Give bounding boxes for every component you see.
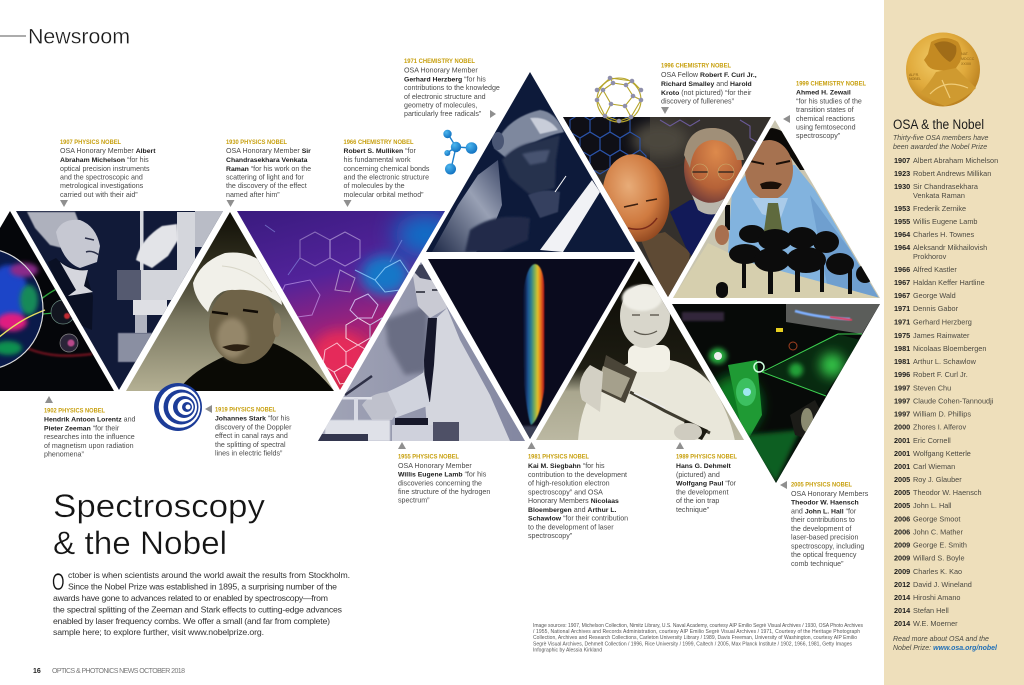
caption: 1955 physics: fine structure of the hydrogen	[398, 488, 490, 496]
caption: 1989 physics: the development	[676, 488, 728, 496]
caption: 1981 physics: spectroscopy” and OSA	[528, 488, 603, 496]
laureate list: 2014	[894, 593, 911, 602]
laureate list: Claude Cohen-Tannoudji	[913, 396, 994, 406]
caption: 1902 physics: researches into the influence	[44, 433, 135, 441]
caption: 1919 physics: effect in canal rays and	[215, 432, 288, 440]
image credits: Segrè Visual Archives, Dehmelt Collection / 1996, Rice University / 1999, Caltech / 2005, Max Planck Institute / 1902, 1966, 1981, Getty Images	[533, 642, 852, 648]
caption: 1907 physics: metrological investigations	[60, 182, 144, 190]
laureate list: Dennis Gabor	[913, 304, 959, 313]
icon: spiral target	[154, 383, 202, 431]
laureate list: Nicolaas Bloembergen	[913, 344, 986, 353]
caption: 1971 chemistry: geometry of molecules,	[404, 102, 477, 110]
caption: 1955 physics: 1955 PHYSICS NOBEL	[398, 454, 459, 460]
triangle photo: 1971 Herzberg	[420, 65, 640, 255]
laureate list: 2006	[894, 528, 910, 536]
caption: 1907 physics: carried out with their aid”	[60, 191, 138, 199]
caption: 1999 chemistry: chemical reactions	[796, 115, 855, 123]
caption: 1999 chemistry: Ahmed H. Zewail	[796, 90, 851, 96]
laureate list: 1964	[894, 243, 911, 252]
laureate list: John C. Mather	[913, 528, 963, 536]
laureate list: William D. Phillips	[913, 410, 971, 418]
footer: 16	[33, 668, 41, 675]
caption: 1907 physics: optical precision instruments	[60, 165, 150, 173]
caption: 1930 physics: scattering of light and for	[226, 174, 304, 182]
arrow: 1996 pointer	[661, 107, 669, 114]
caption: 1971 chemistry: OSA Honorary Member	[404, 66, 478, 74]
laureate list: 2009	[894, 540, 910, 550]
triangle photo: 1989 Dehmelt	[536, 261, 744, 440]
sidebar footer link: Nobel Prize: www.osa.org/nobel	[893, 645, 998, 652]
arrow: 1907 pointer	[60, 200, 68, 207]
caption: 1981 physics: 1981 PHYSICS NOBEL	[528, 454, 589, 460]
caption: 1930 physics	[226, 139, 311, 199]
caption: 1981 physics: to the development of laser	[528, 524, 614, 532]
caption: 1971 chemistry: 1971 CHEMISTRY NOBEL	[404, 58, 475, 65]
caption: 1989 physics: technique”	[676, 506, 710, 514]
triangle photo: 1996 Curl and Smalley	[560, 110, 775, 300]
caption: 1919 physics: discovery of the Doppler	[215, 424, 292, 432]
laureate list: 2009	[894, 554, 910, 562]
laureate list: 2012	[894, 580, 910, 589]
caption: 1902 physics: Pieter Zeeman “for their	[44, 424, 120, 432]
laureate list: Albert Abraham Michelson	[913, 156, 998, 165]
caption: 1996 chemistry: Richard Smalley and Harold	[661, 80, 752, 88]
laureate list: W.E. Moerner	[913, 619, 958, 628]
caption: 1989 physics: Hans G. Dehmelt	[676, 463, 731, 470]
intro paragraph: awards have gone to advances related to or enabled by spectroscopy—from	[53, 593, 328, 603]
caption: 1955 physics: Willis Eugene Lamb “for his	[398, 470, 487, 478]
caption: 1971 chemistry: particularly free radicals”	[404, 110, 482, 118]
laureate list: 2005	[894, 501, 910, 510]
arrow: 2005 pointer	[780, 481, 787, 489]
arrow: 1930 pointer	[226, 200, 234, 207]
image credits	[533, 623, 864, 654]
caption: 2005 physics: the development of	[791, 525, 851, 533]
laureate list: Eric Cornell	[913, 436, 951, 445]
caption: 2005 physics: their contributions to	[791, 516, 855, 524]
sidebar subhead: Thirty-five OSA members have	[893, 135, 989, 142]
caption: 2005 physics: 2005 PHYSICS NOBEL	[791, 482, 852, 488]
laureate list: 1955	[894, 217, 910, 226]
arrow: 1966 pointer	[344, 200, 352, 207]
caption: 1907 physics: 1907 PHYSICS NOBEL	[60, 139, 121, 146]
intro paragraph: the spectral splitting of the Zeeman and Stark effects to cutting-edge advances	[53, 604, 343, 614]
laureate list: Robert Andrews Millikan	[913, 169, 991, 178]
laureate list: 2005	[894, 475, 910, 484]
laureate list: Robert F. Curl Jr.	[913, 370, 968, 379]
icon: Nobel medal: ALFR.	[909, 73, 919, 77]
laureate list: 1966	[894, 265, 910, 274]
laureate list	[894, 156, 998, 628]
laureate list: 1981	[894, 344, 910, 353]
sidebar content	[893, 32, 998, 652]
intro paragraph: O	[52, 569, 64, 596]
arrow: 1989 pointer	[676, 442, 684, 449]
laureate list: 2001	[894, 436, 910, 445]
laureate list: Zhores I. Alferov	[913, 422, 966, 432]
caption: 1996 chemistry: OSA Fellow Robert F. Curl Jr.,	[661, 71, 757, 79]
caption: 1981 physics: spectroscopy”	[528, 532, 573, 540]
caption: 1971 chemistry: of electronic structure and	[404, 93, 486, 101]
caption: 1919 physics: the splitting of spectral	[215, 441, 286, 449]
caption: 1996 chemistry: Kroto (not pictured) “for their	[661, 89, 752, 97]
icon: Nobel medal	[906, 32, 980, 106]
caption: 1999 chemistry: using femtosecond	[796, 124, 856, 132]
laureate list: 2006	[894, 514, 910, 524]
header: Newsroom: Newsroom	[28, 24, 130, 48]
caption: 1966 chemistry: and the electronic structure	[344, 174, 429, 182]
title	[53, 488, 265, 561]
caption: 2005 physics	[791, 482, 869, 568]
laureate list: Haldan Keffer Hartline	[913, 278, 985, 287]
triangle photo: 1981 spectrum	[428, 259, 635, 439]
laureate list: George Wald	[913, 291, 956, 300]
image credits: Image sources: 1907, Michelson Collection, Nimitz Library, U.S. Naval Academy, courtesy AIP Emilio Segrè Visual Archives / 1930, OSA Photo Archives	[533, 623, 864, 629]
caption: 2005 physics: comb technique”	[791, 560, 844, 568]
caption: 1999 chemistry	[796, 80, 866, 140]
sidebar footer link	[893, 636, 998, 652]
laureate list: Aleksandr Mikhailovish	[913, 243, 987, 252]
caption: 1971 chemistry	[404, 58, 500, 118]
caption: 1989 physics: Wolfgang Paul “for	[676, 480, 737, 488]
icon: Nobel medal: MDCCC	[961, 57, 975, 61]
laureate list: Roy J. Glauber	[913, 475, 962, 484]
laureate list: 2009	[894, 567, 910, 576]
caption: 2005 physics: OSA Honorary Members	[791, 490, 869, 498]
caption: 1989 physics: (pictured) and	[676, 471, 720, 479]
caption: 1981 physics: Bloembergen and Arthur L.	[528, 506, 617, 514]
laureate list: 1967	[894, 278, 910, 287]
icon: Nobel medal: XXXIII	[961, 62, 971, 66]
caption: 2005 physics: Theodor W. Haensch	[791, 500, 859, 506]
caption: 1981 physics: Schawlow “for their contribution	[528, 514, 628, 522]
caption: 1966 chemistry: concerning chemical bonds	[344, 165, 430, 173]
caption: 1966 chemistry	[344, 139, 430, 199]
laureate list: John L. Hall	[913, 501, 952, 510]
laureate list: George E. Smith	[913, 540, 967, 550]
caption: 1996 chemistry	[661, 62, 757, 106]
caption: 1919 physics: Johannes Stark “for his	[215, 414, 290, 422]
arrow: 1999 pointer	[783, 115, 790, 123]
caption: 1966 chemistry: his fundamental work	[344, 156, 411, 164]
laureate list: 1981	[894, 357, 910, 366]
laureate list: Willis Eugene Lamb	[913, 217, 978, 226]
laureate list: 1997	[894, 396, 910, 406]
title: Spectroscopy	[53, 488, 265, 524]
caption: 1902 physics	[44, 408, 136, 458]
laureate list: 1971	[894, 304, 910, 313]
arrow: 1902 pointer	[45, 396, 53, 403]
caption: 1989 physics: 1989 PHYSICS NOBEL	[676, 454, 737, 460]
laureate list: James Rainwater	[913, 331, 970, 340]
sidebar footer link: Read more about OSA and the	[893, 636, 989, 643]
intro paragraph	[52, 569, 350, 637]
caption: 1981 physics	[528, 454, 628, 540]
sidebar subhead	[893, 135, 989, 151]
caption: 1902 physics: Hendrik Antoon Lorentz and	[44, 416, 136, 424]
caption: 1930 physics: Chandrasekhara Venkata	[226, 157, 308, 164]
laureate list: Sir Chandrasekhara	[913, 182, 979, 191]
caption: 2005 physics: spectroscopy, including	[791, 542, 864, 550]
laureate list: 1953	[894, 204, 910, 213]
caption: 1981 physics: of high-resolution electron	[528, 480, 610, 488]
triangle photo: 1955 Lamb	[318, 262, 525, 441]
icon: Nobel medal: NOBEL	[909, 77, 921, 81]
caption: 1971 chemistry: Gerhard Herzberg “for his	[404, 76, 486, 84]
caption: 1999 chemistry: 1999 CHEMISTRY NOBEL	[796, 80, 866, 88]
laureate list: 2001	[894, 449, 910, 458]
caption: 1907 physics	[60, 139, 156, 199]
laureate list: 2000	[894, 422, 910, 432]
image credits: Collection, Archives and Research Collections, Carleton University Library / 1989, Davis Freeman, University of Washington, courtesy AIP Emilio	[533, 635, 857, 641]
laureate list: 1996	[894, 370, 910, 379]
laureate list: David J. Wineland	[913, 580, 972, 589]
caption: 1981 physics: Honorary Members Nicolaas	[528, 497, 619, 505]
caption: 1907 physics: and the spectroscopic and	[60, 174, 143, 182]
caption: 1989 physics: of the ion trap	[676, 497, 719, 505]
icon: blue molecule	[443, 130, 477, 174]
laureate list: Willard S. Boyle	[913, 554, 964, 562]
caption: 2005 physics: laser-based precision	[791, 534, 858, 542]
arrow: 1981 pointer	[528, 442, 536, 449]
laureate list: 1923	[894, 169, 910, 178]
laureate list: 1967	[894, 291, 910, 300]
arrow: 1955 pointer	[398, 442, 406, 449]
triangle photo: 1902 plasma sphere	[0, 205, 120, 395]
triangle photo: 1930 Raman	[126, 212, 334, 391]
caption: 1930 physics: OSA Honorary Member Sir	[226, 147, 311, 155]
caption: 2005 physics: and John L. Hall “for	[791, 508, 857, 516]
caption: 1996 chemistry: discovery of fullerenes”	[661, 98, 735, 106]
caption: 1966 chemistry: Robert S. Mulliken “for	[344, 147, 416, 155]
caption: 1930 physics: Raman “for his work on the	[226, 165, 311, 173]
caption: 2005 physics: the optical frequency	[791, 551, 857, 559]
caption: 1902 physics: 1902 PHYSICS NOBEL	[44, 408, 105, 414]
laureate list: George Smoot	[913, 514, 960, 524]
laureate list: 2005	[894, 488, 910, 497]
laureate list: Prokhorov	[913, 252, 947, 261]
triangle photo: 1966 molecule art	[237, 211, 445, 390]
laureate list: 2014	[894, 606, 911, 615]
caption: 1955 physics	[398, 454, 490, 504]
laureate list: 1997	[894, 410, 910, 418]
caption: 1989 physics	[676, 454, 737, 514]
caption: 1996 chemistry: 1996 CHEMISTRY NOBEL	[661, 62, 731, 70]
laureate list: 1930	[894, 182, 910, 191]
intro paragraph: Since the Nobel Prize was established in 1895, a surprising number of the	[68, 582, 337, 592]
caption: 1930 physics: the discovery of the effect	[226, 182, 307, 190]
laureate list: Venkata Raman	[913, 191, 965, 200]
laureate list: 1997	[894, 384, 910, 392]
caption: 1955 physics: discoveries concerning the	[398, 480, 482, 488]
caption: 1902 physics: phenomena”	[44, 450, 84, 458]
laureate list: 1907	[894, 156, 910, 165]
caption: 1919 physics	[215, 406, 292, 458]
laureate list: Alfred Kastler	[913, 265, 957, 274]
footer: OPTICS & PHOTONICS NEWS OCTOBER 2018	[52, 668, 185, 675]
laureate list: Steven Chu	[913, 384, 951, 392]
laureate list: Arthur L. Schawlow	[913, 357, 977, 366]
caption: 1907 physics: OSA Honorary Member Albert	[60, 147, 156, 155]
sidebar subhead: been awarded the Nobel Prize	[893, 144, 987, 151]
caption: 1930 physics: 1930 PHYSICS NOBEL	[226, 139, 287, 146]
caption: 1907 physics: Abraham Michelson “for his	[60, 156, 149, 164]
caption: 1919 physics: lines in electric fields”	[215, 450, 283, 458]
caption: 1966 chemistry: molecular orbital method”	[344, 191, 424, 199]
laureate list: 2014	[894, 619, 911, 628]
laureate list: Wolfgang Ketterle	[913, 449, 971, 458]
laureate list: 1971	[894, 318, 910, 326]
caption: 1999 chemistry: spectroscopy”	[796, 132, 841, 140]
arrow: 1919 pointer	[205, 405, 212, 413]
caption: 1930 physics: named after him”	[226, 191, 280, 199]
caption: 1955 physics: OSA Honorary Member	[398, 462, 472, 470]
caption: 1971 chemistry: contributions to the knowledge	[404, 84, 500, 92]
laureate list: Carl Wieman	[913, 462, 955, 471]
triangle photo: 1999 Zewail	[670, 115, 885, 305]
laureate list: Charles H. Townes	[913, 230, 974, 239]
icon: fullerene molecule	[595, 76, 643, 123]
caption: 1966 chemistry: 1966 CHEMISTRY NOBEL	[344, 139, 414, 146]
caption: 1919 physics: 1919 PHYSICS NOBEL	[215, 406, 276, 414]
icon: Nobel medal: NAT.	[961, 52, 969, 56]
laureate list: Theodor W. Haensch	[913, 488, 982, 497]
laureate list: Hiroshi Amano	[913, 593, 960, 602]
sidebar panel background	[884, 0, 1024, 685]
laureate list: 1964	[894, 230, 911, 239]
laureate list: 1975	[894, 331, 910, 340]
image credits: Infographic by Alessia Kirkland	[533, 648, 602, 654]
intro paragraph: ctober is when scientists around the world await the results from Stockholm.	[68, 570, 350, 580]
intro paragraph: enabled by laser frequency combs. We offer a small (and far from complete)	[53, 616, 330, 626]
caption: 1966 chemistry: of molecules by the	[344, 182, 405, 190]
caption: 1902 physics: of magnetism upon radiation	[44, 442, 134, 450]
laureate list: Gerhard Herzberg	[913, 318, 972, 326]
sidebar heading: OSA & the Nobel	[893, 117, 984, 132]
caption: 1981 physics: contribution to the development	[528, 471, 627, 479]
triangle photo: 2005 laser lab	[670, 300, 885, 490]
image credits: / 1955, National Archives and Records Administration, courtesy AIP Emilio Segrè Visual Archives / 1971, Courtesy of the Heritage Photograph	[533, 629, 860, 635]
laureate list: Stefan Hell	[913, 606, 949, 615]
caption: 1955 physics: spectrum”	[398, 496, 430, 504]
laureate list: Frederik Zernike	[913, 204, 966, 213]
caption: 1981 physics: Kai M. Siegbahn “for his	[528, 462, 605, 470]
laureate list: 2001	[894, 462, 910, 471]
arrow: 1971 pointer	[490, 110, 496, 118]
caption: 1999 chemistry: “for his studies of the	[796, 98, 862, 106]
title: & the Nobel	[53, 525, 227, 561]
intro paragraph: sample here; to explore further, visit www.nobelprize.org.	[53, 627, 264, 637]
caption: 1999 chemistry: transition states of	[796, 106, 854, 114]
triangle photo: 1907 Michelson	[16, 211, 223, 390]
laureate list: Charles K. Kao	[913, 567, 962, 576]
